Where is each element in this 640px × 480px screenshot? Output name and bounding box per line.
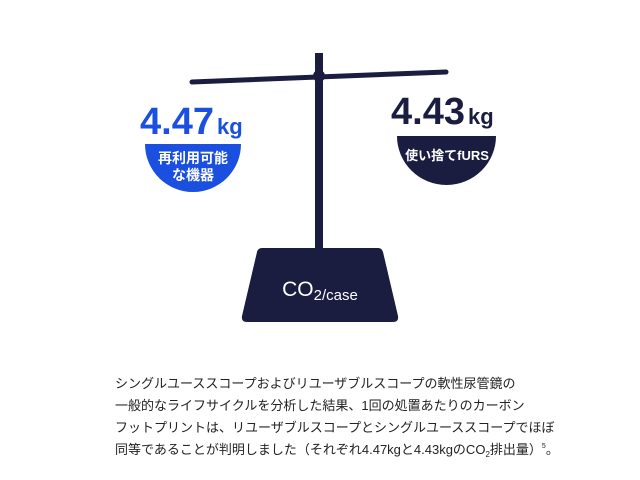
left pan: reusable: な機器	[172, 167, 214, 183]
description text: 同等であることが判明しました（それぞれ4.47kgと4.43kgのCO2排出量）5。	[115, 442, 559, 459]
scale beam	[192, 53, 446, 253]
left pan: reusable	[145, 144, 241, 192]
left value: 4.47kg	[140, 101, 243, 143]
description text: 一般的なライフサイクルを分析した結果、1回の処置あたりのカーボン	[115, 398, 525, 413]
description text: フットプリントは、リユーザブルスコープとシングルユーススコープでほぼ	[115, 420, 555, 435]
scale base: CO	[282, 278, 314, 301]
scale illustration	[140, 53, 496, 322]
left pan: reusable: 再利用可能	[158, 150, 228, 166]
right pan: single-use: 使い捨てfURS	[405, 148, 489, 163]
description text	[115, 376, 559, 459]
scale base	[242, 248, 398, 322]
right value: 4.43kg	[391, 91, 494, 133]
description text: シングルユーススコープおよびリユーザブルスコープの軟性尿管鏡の	[115, 376, 516, 391]
scale base: 2/case	[314, 287, 358, 304]
right pan: single-use	[397, 136, 496, 185]
